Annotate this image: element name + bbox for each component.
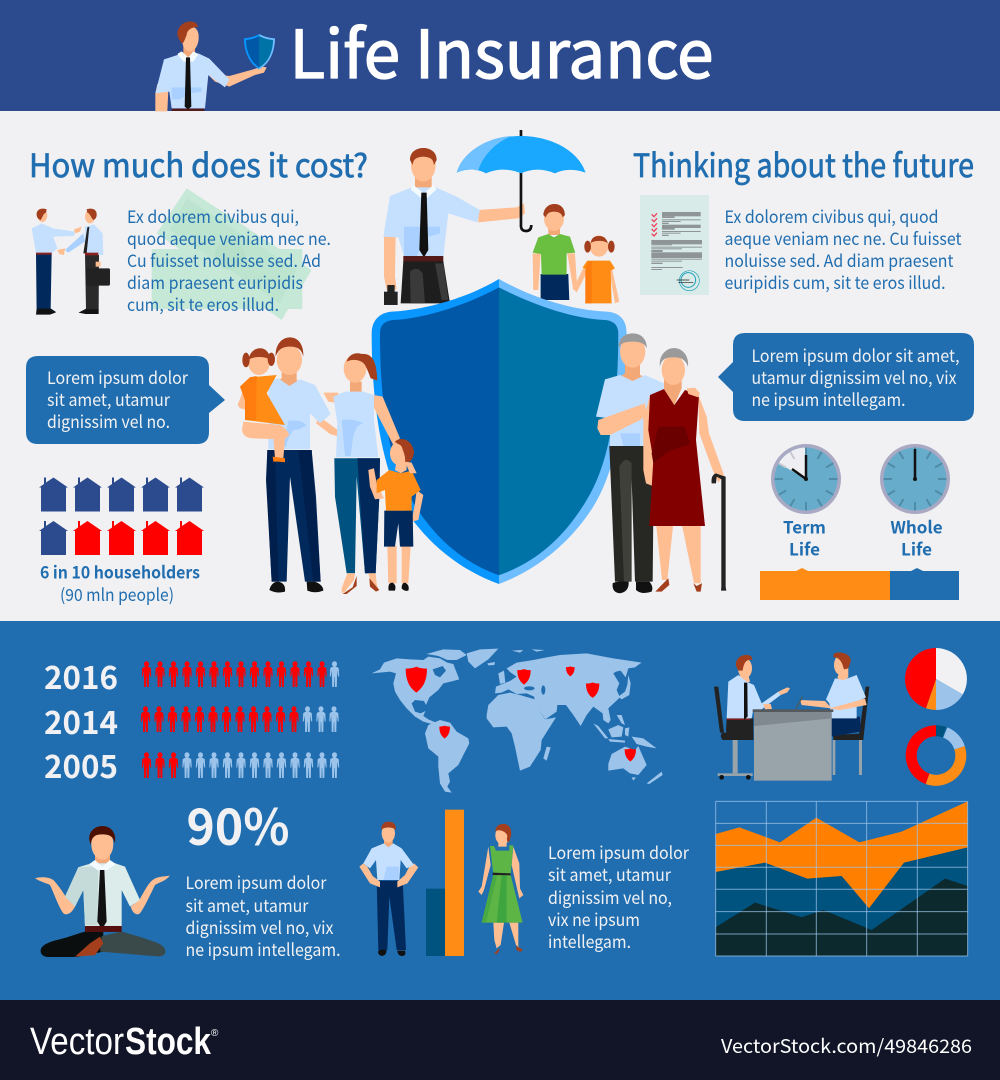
icon: document with stamp <box>640 195 709 295</box>
panel: thinking about the future <box>633 141 974 295</box>
label: term life: Term <box>783 514 826 539</box>
year row 2016 <box>44 653 339 699</box>
right man <box>796 652 867 737</box>
label: whole life: Life <box>901 536 932 561</box>
header figure: man holding shield <box>155 22 275 111</box>
text block: 90 percent <box>186 869 340 961</box>
text block: right of woman: intellegam. <box>548 928 631 953</box>
text block: cost: diam praesent euripidis <box>127 269 303 294</box>
footer logo <box>30 1021 219 1063</box>
pie chart <box>905 648 967 710</box>
label: term life: Life <box>789 536 820 561</box>
callout: right: Lorem ipsum dolor sit amet, <box>752 342 960 367</box>
woman <box>478 824 523 954</box>
header band <box>0 0 1000 111</box>
donut chart <box>911 731 961 780</box>
text block: cost: cum, sit te eros illud. <box>127 291 279 316</box>
pictogram: houses 6 in 10 <box>39 478 204 555</box>
left chair <box>714 687 753 780</box>
text block: cost: Ex dolorem civibus qui, <box>127 203 299 228</box>
text block: cost <box>127 203 331 316</box>
label: households <box>40 559 200 606</box>
boy in green <box>533 204 577 300</box>
cane <box>711 473 726 591</box>
illustration: shield, umbrella and families <box>238 130 627 594</box>
year row 2014: 2014 <box>44 698 118 744</box>
icon: money <box>152 188 312 320</box>
text block: future: aeque veniam nec ne. Cu fuisset <box>724 225 962 250</box>
clock: whole life <box>880 444 950 514</box>
man with umbrella <box>383 148 525 305</box>
text block: 90 percent: Lorem ipsum dolor <box>186 869 327 894</box>
label: term life <box>783 514 826 561</box>
title: Life Insurance <box>290 2 714 98</box>
mother <box>333 353 400 594</box>
text block: future: Ex dolorem civibus qui, quod <box>724 203 938 228</box>
year row 2016: 2016 <box>44 653 118 699</box>
callout: left: Lorem ipsum dolor <box>47 364 188 389</box>
panel: how much does it cost <box>29 141 368 320</box>
clock: term life <box>771 444 841 514</box>
right chair <box>833 687 869 775</box>
area chart <box>716 801 968 956</box>
callout: left <box>26 356 225 444</box>
callout: left: sit amet, utamur <box>47 386 170 411</box>
text block: right of woman: sit amet, utamur <box>548 861 671 886</box>
background: light panel <box>0 111 1000 621</box>
meditating man <box>35 826 170 957</box>
footer logo: Stock <box>125 1021 212 1063</box>
text block: future: noluisse sed. Ad diam praesent <box>724 247 954 272</box>
bottom blue panel <box>0 621 1000 1000</box>
grandfather <box>596 333 664 593</box>
footer url: VectorStock.com/49846286 <box>721 1032 972 1059</box>
text block: right of woman: dignissim vel no, <box>548 884 672 909</box>
callout: right <box>718 333 974 421</box>
man <box>359 822 418 956</box>
text block: 90 percent: ne ipsum intellegam. <box>186 936 340 961</box>
illustration: elderly couple <box>596 333 726 593</box>
grandmother <box>643 348 724 592</box>
label: whole life: Whole <box>890 514 943 539</box>
year row 2005: 2005 <box>44 742 118 788</box>
year row 2005 <box>44 742 339 788</box>
footer logo: Vector <box>30 1021 124 1063</box>
text block: right of woman: Lorem ipsum dolor <box>548 839 689 864</box>
big number 90%: 90% <box>186 788 290 860</box>
text block: cost: quod aeque veniam nec ne. <box>127 225 331 250</box>
callout: right: ne ipsum intellegam. <box>752 386 906 411</box>
text block: right of woman: vix ne ipsum <box>548 906 640 931</box>
girl in father's arms <box>238 348 289 462</box>
umbrella <box>457 130 586 231</box>
callout: left: dignissim vel no. <box>47 408 170 433</box>
text block: cost: Cu fuisset noluisse sed. Ad <box>127 247 321 272</box>
desk <box>753 709 833 781</box>
meeting at desk <box>714 652 869 781</box>
father <box>266 337 340 592</box>
girl in orange <box>573 235 619 303</box>
man and woman with bars <box>359 810 523 956</box>
footer band <box>0 1000 1000 1080</box>
boy in orange <box>368 439 423 591</box>
heading: how much does it cost: How much does it cost? <box>29 141 368 187</box>
year row 2014 <box>44 698 339 744</box>
text block: right of woman <box>548 839 689 953</box>
years pictogram chart <box>44 653 339 788</box>
bar: term vs whole <box>760 568 959 600</box>
label: households: (90 mln people) <box>60 581 174 606</box>
label: whole life <box>890 514 943 561</box>
world map with shields <box>372 649 663 793</box>
text block: 90 percent: dignissim vel no, vix <box>186 914 334 939</box>
footer logo: ® <box>211 1028 219 1039</box>
callout: right: utamur dignissim vel no, vix <box>752 364 957 389</box>
text block: 90 percent: sit amet, utamur <box>186 892 309 917</box>
left man <box>726 655 790 740</box>
icon: handshake between two men <box>32 209 110 315</box>
text block: future <box>724 203 962 294</box>
label: households: 6 in 10 householders <box>40 559 200 584</box>
shield <box>372 279 627 584</box>
bars <box>426 810 464 956</box>
text block: future: euripidis cum, sit te eros illud. <box>724 269 946 294</box>
